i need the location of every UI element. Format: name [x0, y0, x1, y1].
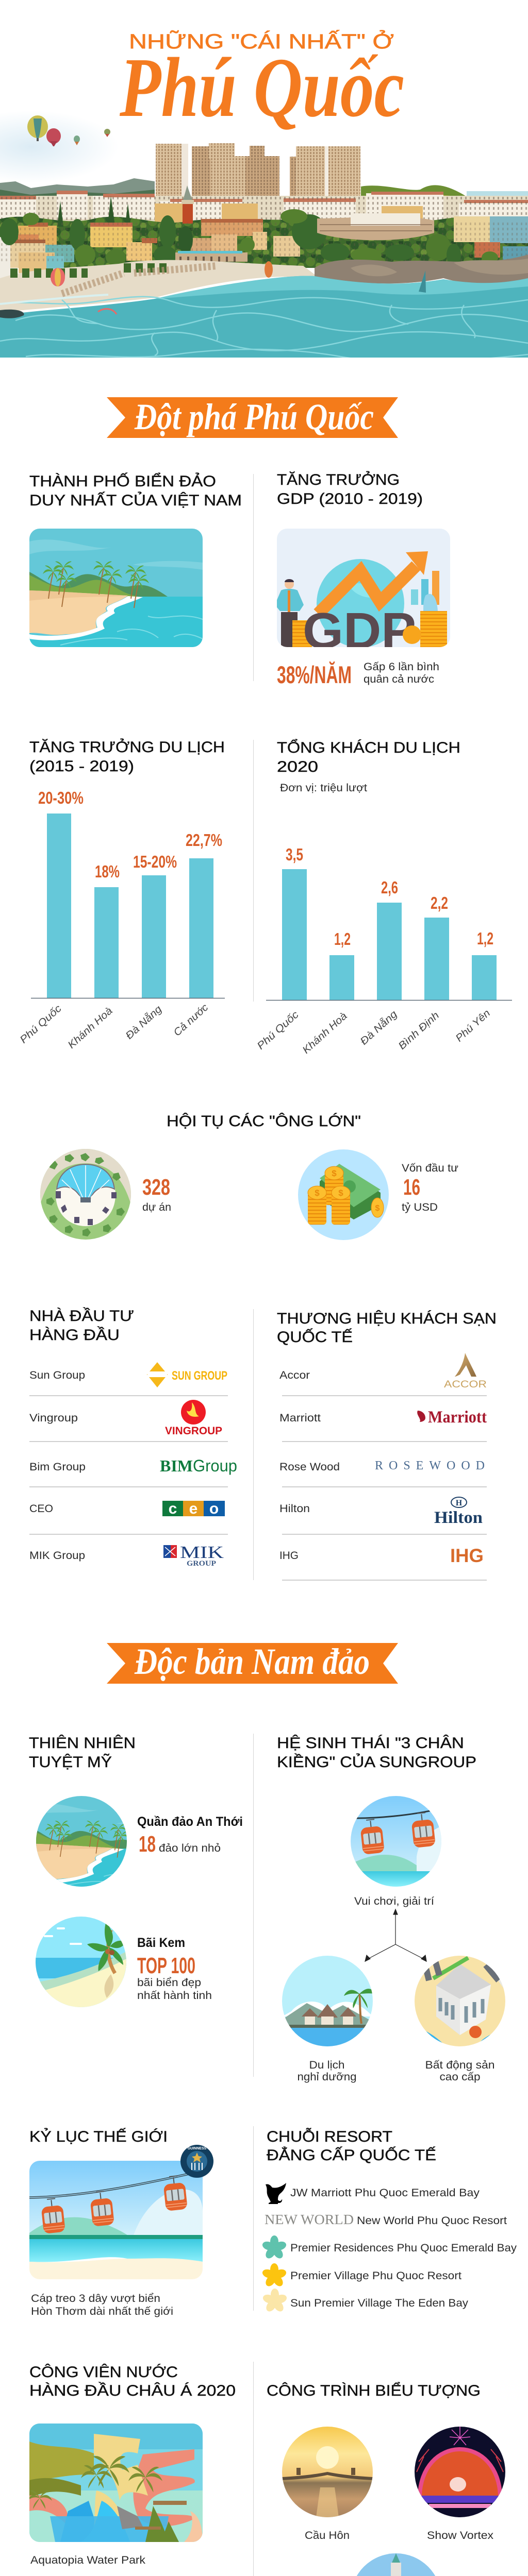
heading: iconic works: CÔNG TRÌNH BIỂU TƯỢNG [267, 2382, 481, 2399]
row: Sun Group [29, 1362, 227, 1387]
heading: ecosystem: HỆ SINH THÁI "3 CHÂN [277, 1735, 464, 1752]
arcade and pool [175, 251, 248, 262]
photo: Show Vortex [415, 2427, 505, 2517]
row: Sun Group: Sun Group [29, 1369, 85, 1381]
illustration: resort huts [282, 1956, 375, 2048]
heading: island city: THÀNH PHỐ BIỂN ĐẢO [29, 472, 216, 490]
stat: Bãi Kem top 100: nhất hành tinh [137, 1990, 212, 2002]
bar chart: growth by area: Phú Quốc [18, 1003, 64, 1046]
bar chart: visitors by province: 1,2 [334, 929, 351, 948]
heading: pristine nature [29, 1735, 136, 1771]
heading: tourism growth: (2015 - 2019) [29, 758, 134, 775]
trees and mid-slope [0, 217, 528, 268]
bar chart: growth by area: 20-30% [38, 788, 84, 807]
row: IHG [279, 1545, 484, 1566]
heading: tourism growth [29, 738, 225, 775]
panel: international hotel brands [277, 1310, 497, 1580]
unit note: Đơn vị: triệu lượt [280, 782, 367, 794]
row: Accor [279, 1353, 487, 1390]
heading: ecosystem: KIỀNG" CỦA SUNGROUP [277, 1753, 476, 1771]
illustration: Hòn Thơm cable car [29, 2161, 203, 2279]
heading: hotel brands [277, 1310, 497, 1346]
row: Sun Premier Village The Eden Bay [262, 2289, 469, 2313]
row: Premier Village: Premier Village Phu Quoc Resort [290, 2270, 461, 2282]
arrows: three pillars [365, 1909, 426, 1961]
stat: Bãi Kem top 100: bãi biển đẹp [137, 1977, 201, 1989]
bar chart: growth by area: 15-20% [133, 852, 177, 871]
icon: hot air balloons [27, 115, 110, 146]
illustration: water slides [27, 2424, 203, 2542]
stat: 16 billion USD: 16 [403, 1175, 420, 1200]
row: Accor: Accor [279, 1369, 310, 1381]
captions: resort and real estate: nghỉ dưỡng [297, 2071, 357, 2083]
caption: longest three-rope cable car: Cáp treo 3 dây vượt biển [31, 2293, 160, 2304]
row: Accor: ACCOR [444, 1379, 487, 1390]
stat: An Thới 18 islands: đảo lớn nhỏ [159, 1842, 221, 1854]
icon: money pile [298, 1149, 389, 1240]
illustration: GDP growth arrow: GDP [303, 602, 416, 659]
illustration: An Thới archipelago [36, 1796, 127, 1887]
stat: An Thới 18 islands [137, 1815, 243, 1857]
row: MIK Group: MIK [180, 1543, 224, 1562]
bar chart: visitors by province: 2,6 [381, 878, 398, 897]
note: six times national average [364, 661, 439, 685]
section banner: Độc bản Nam đảo: Độc bản Nam đảo [134, 1641, 370, 1682]
panel: total visitors 2020 bar chart [255, 739, 512, 1056]
illustration: GDP growth arrow [277, 529, 450, 647]
stat: An Thới 18 islands: Quần đảo An Thới [137, 1815, 243, 1829]
row: Marriott: Marriott [428, 1408, 487, 1427]
heading: world record: KỶ LỤC THẾ GIỚI [29, 2128, 168, 2145]
stat: Bãi Kem top 100: TOP 100 [137, 1953, 195, 1978]
bar chart: visitors by province [255, 845, 512, 1056]
panel: pristine nature [29, 1735, 243, 2008]
photo: Central Village clock tower [357, 2553, 435, 2576]
row: Sun Group: SUN GROUP [172, 1369, 227, 1383]
row: New World: NEW WORLD [265, 2212, 354, 2227]
row: MIK Group [29, 1543, 224, 1568]
captions: Cầu Hôn and Show Vortex: Show Vortex [427, 2530, 494, 2541]
heading: total visitors: TỔNG KHÁCH DU LỊCH [277, 739, 460, 756]
bar chart: visitors by province: Phú Yên [454, 1007, 492, 1044]
illustration: premium real estate [415, 1956, 507, 2048]
bar chart: growth by area: Khánh Hoà [66, 1005, 115, 1051]
row: Vingroup: Vingroup [29, 1412, 78, 1424]
row: CEO: c [169, 1500, 177, 1517]
heading: resort chain: CHUỖI RESORT [267, 2128, 392, 2145]
caption: entertainment: Vui chơi, giải trí [354, 1895, 434, 1907]
stat: 328 projects: 328 [142, 1175, 170, 1200]
row: Bim Group: Group [193, 1456, 237, 1475]
row: Hilton [279, 1497, 483, 1527]
stat: An Thới 18 islands: 18 [139, 1832, 156, 1857]
row: Hilton: H [456, 1499, 463, 1507]
row: JW Marriott: JW Marriott Phu Quoc Emerald Bay [290, 2187, 480, 2199]
row: Sun Premier Village The Eden Bay: Sun Premier Village The Eden Bay [290, 2297, 469, 2309]
panel: Aquatopia water park [27, 2363, 236, 2566]
bar chart: visitors by province: 2,2 [431, 893, 448, 912]
title: Phú Quốc: Phú Quốc [119, 40, 404, 134]
row: IHG: IHG [279, 1550, 299, 1562]
badge: Guinness World Records [180, 2145, 213, 2178]
panel: world record [29, 2128, 213, 2317]
row: CEO: o [209, 1500, 219, 1517]
bar chart: growth by area: 22,7% [186, 831, 222, 850]
row: MIK Group: GROUP [187, 1560, 216, 1568]
sea with ripples [0, 276, 528, 358]
badge: Guinness World Records: GUINNESS [188, 2147, 207, 2150]
bar chart: growth by area: Cả nước [172, 1002, 210, 1039]
captions: resort and real estate: Bất động sản [425, 2059, 495, 2071]
mountains behind the town [0, 178, 155, 195]
bar chart: visitors by province: Bình Định [397, 1010, 441, 1052]
heading: total visitors [277, 739, 460, 775]
row: MIK Group: MIK Group [29, 1550, 85, 1562]
row: New World: New World Phu Quoc Resort [357, 2215, 507, 2227]
heading: water park: HÀNG ĐẦU CHÂU Á 2020 [29, 2382, 236, 2399]
row: CEO: CEO [29, 1503, 53, 1515]
note: six times national average: Gấp 6 lần bình [364, 661, 439, 673]
tower cluster [156, 143, 360, 196]
heading: resort chain [267, 2128, 436, 2164]
heading: ecosystem [277, 1735, 476, 1771]
bar chart: visitors by province: Phú Quốc [255, 1009, 301, 1052]
stat: 16 billion USD [402, 1162, 458, 1213]
note: six times national average: quân cả nước [364, 673, 434, 685]
row: Marriott: Marriott [279, 1412, 321, 1424]
bar chart: visitors by province: 1,2 [477, 929, 493, 948]
rocky headland [315, 255, 528, 284]
row: Vingroup [29, 1400, 222, 1437]
row: Bim Group: BIM [160, 1456, 193, 1475]
row: Rose Wood [279, 1459, 485, 1473]
row: Marriott [279, 1408, 487, 1427]
heading: pristine nature: TUYỆT MỸ [29, 1753, 112, 1771]
heading: leading investors: NHÀ ĐẦU TƯ [29, 1307, 134, 1325]
illustration: Bãi Kem palm beach [36, 1917, 126, 2008]
stat: 38%/năm: 38%/NĂM [277, 661, 352, 688]
panel: leading investors [29, 1307, 237, 1568]
heading: island city [29, 472, 242, 509]
stat: Bãi Kem top 100 [137, 1936, 212, 2002]
panel: only island city [29, 472, 242, 647]
row: CEO: e [189, 1500, 197, 1517]
stat: 328 projects [142, 1175, 171, 1213]
heading: water park: CÔNG VIÊN NƯỚC [29, 2363, 178, 2381]
stat: 328 projects: dự án [142, 1201, 171, 1213]
row: CEO [29, 1500, 225, 1517]
panel: international resort chain [261, 2128, 517, 2313]
illustration: cable cars [351, 1796, 441, 1887]
hero illustration: Sun Grand City on the coast [0, 115, 528, 358]
bar chart: visitors by province: Đà Nẵng [358, 1008, 400, 1047]
panel: Sun Group three-pillar ecosystem [277, 1735, 507, 2083]
row: Premier Village [261, 2263, 461, 2288]
bar chart: growth by area: 18% [95, 862, 120, 881]
row: Rose Wood: ROSEWOOD [375, 1459, 485, 1472]
row: Hilton: Hilton [434, 1509, 483, 1527]
row: Bim Group: Bim Group [29, 1461, 86, 1473]
captions: resort and real estate: cao cấp [439, 2071, 481, 2083]
row: IHG: IHG [450, 1545, 484, 1566]
hillside villas [0, 191, 528, 223]
heading: water park [29, 2363, 236, 2399]
row: Vingroup: VINGROUP [165, 1425, 222, 1437]
heading: big players: HỘI TỤ CÁC "ÔNG LỚN" [167, 1112, 361, 1130]
trees between the houses [0, 209, 498, 265]
curved hotel [317, 213, 434, 240]
stat: Bãi Kem top 100: Bãi Kem [137, 1936, 185, 1950]
row: Hilton: Hilton [279, 1503, 310, 1515]
icon: shell masterplan [40, 1149, 131, 1240]
bar chart: visitors by province: 3,5 [286, 845, 303, 864]
row: JW Marriott [266, 2183, 480, 2204]
heading: GDP growth: GDP (2010 - 2019) [277, 490, 423, 507]
row: New World [265, 2212, 507, 2227]
captions: Cầu Hôn and Show Vortex: Cầu Hôn [305, 2530, 350, 2541]
row: Bim Group [29, 1456, 237, 1475]
bar chart: visitors by province: Khánh Hoà [301, 1010, 350, 1056]
stat: 16 billion USD: tỷ USD [402, 1201, 438, 1213]
title: Những "cái nhất" ở: NHỮNG "CÁI NHẤT" Ở [129, 29, 394, 53]
bar chart: growth by area: Đà Nẵng [123, 1003, 164, 1042]
row: Premier Residences [261, 2235, 517, 2260]
row: Premier Residences: Premier Residences Phu Quoc Emerald Bay [290, 2242, 517, 2254]
decorations: kites and sailboat [51, 261, 426, 314]
captions: resort and real estate [297, 2059, 495, 2083]
caption: longest three-rope cable car [31, 2293, 173, 2317]
caption: longest three-rope cable car: Hòn Thơm dài nhất thế giới [31, 2306, 173, 2317]
captions: resort and real estate: Du lịch [309, 2059, 344, 2071]
heading: island city: DUY NHẤT CỦA VIỆT NAM [29, 492, 242, 509]
stat: 16 billion USD: Vốn đầu tư [402, 1162, 458, 1174]
heading: leading investors [29, 1307, 134, 1344]
panel: iconic works [267, 2382, 505, 2576]
bar chart: growth by area [18, 788, 225, 1051]
heading: hotel brands: THƯƠNG HIỆU KHÁCH SẠN [277, 1310, 497, 1327]
panel: tourism growth bar chart [18, 738, 225, 1051]
row: Rose Wood: Rose Wood [279, 1461, 340, 1473]
heading: hotel brands: QUỐC TẾ [277, 1328, 353, 1346]
heading: leading investors: HÀNG ĐẦU [29, 1326, 120, 1344]
heading: resort chain: ĐẲNG CẤP QUỐC TẾ [267, 2146, 436, 2164]
panel: GDP growth [275, 471, 450, 688]
beach [0, 260, 320, 312]
heading: GDP growth: TĂNG TRƯỞNG [277, 471, 400, 488]
illustration: island beach [29, 529, 203, 647]
heading: tourism growth: TĂNG TRƯỞNG DU LỊCH [29, 738, 225, 756]
heading: pristine nature: THIÊN NHIÊN [29, 1735, 136, 1752]
captions: Cầu Hôn and Show Vortex [305, 2530, 494, 2541]
photo: Kiss Bridge at sunset [282, 2427, 373, 2517]
heading: total visitors: 2020 [277, 758, 318, 775]
caption: Aquatopia: Aquatopia Water Park [30, 2554, 146, 2566]
section banner: Đột phá Phú Quốc: Đột phá Phú Quốc [134, 396, 374, 437]
colourful lower town [0, 216, 528, 278]
red clock tower [182, 185, 194, 224]
heading: GDP growth [277, 471, 423, 507]
